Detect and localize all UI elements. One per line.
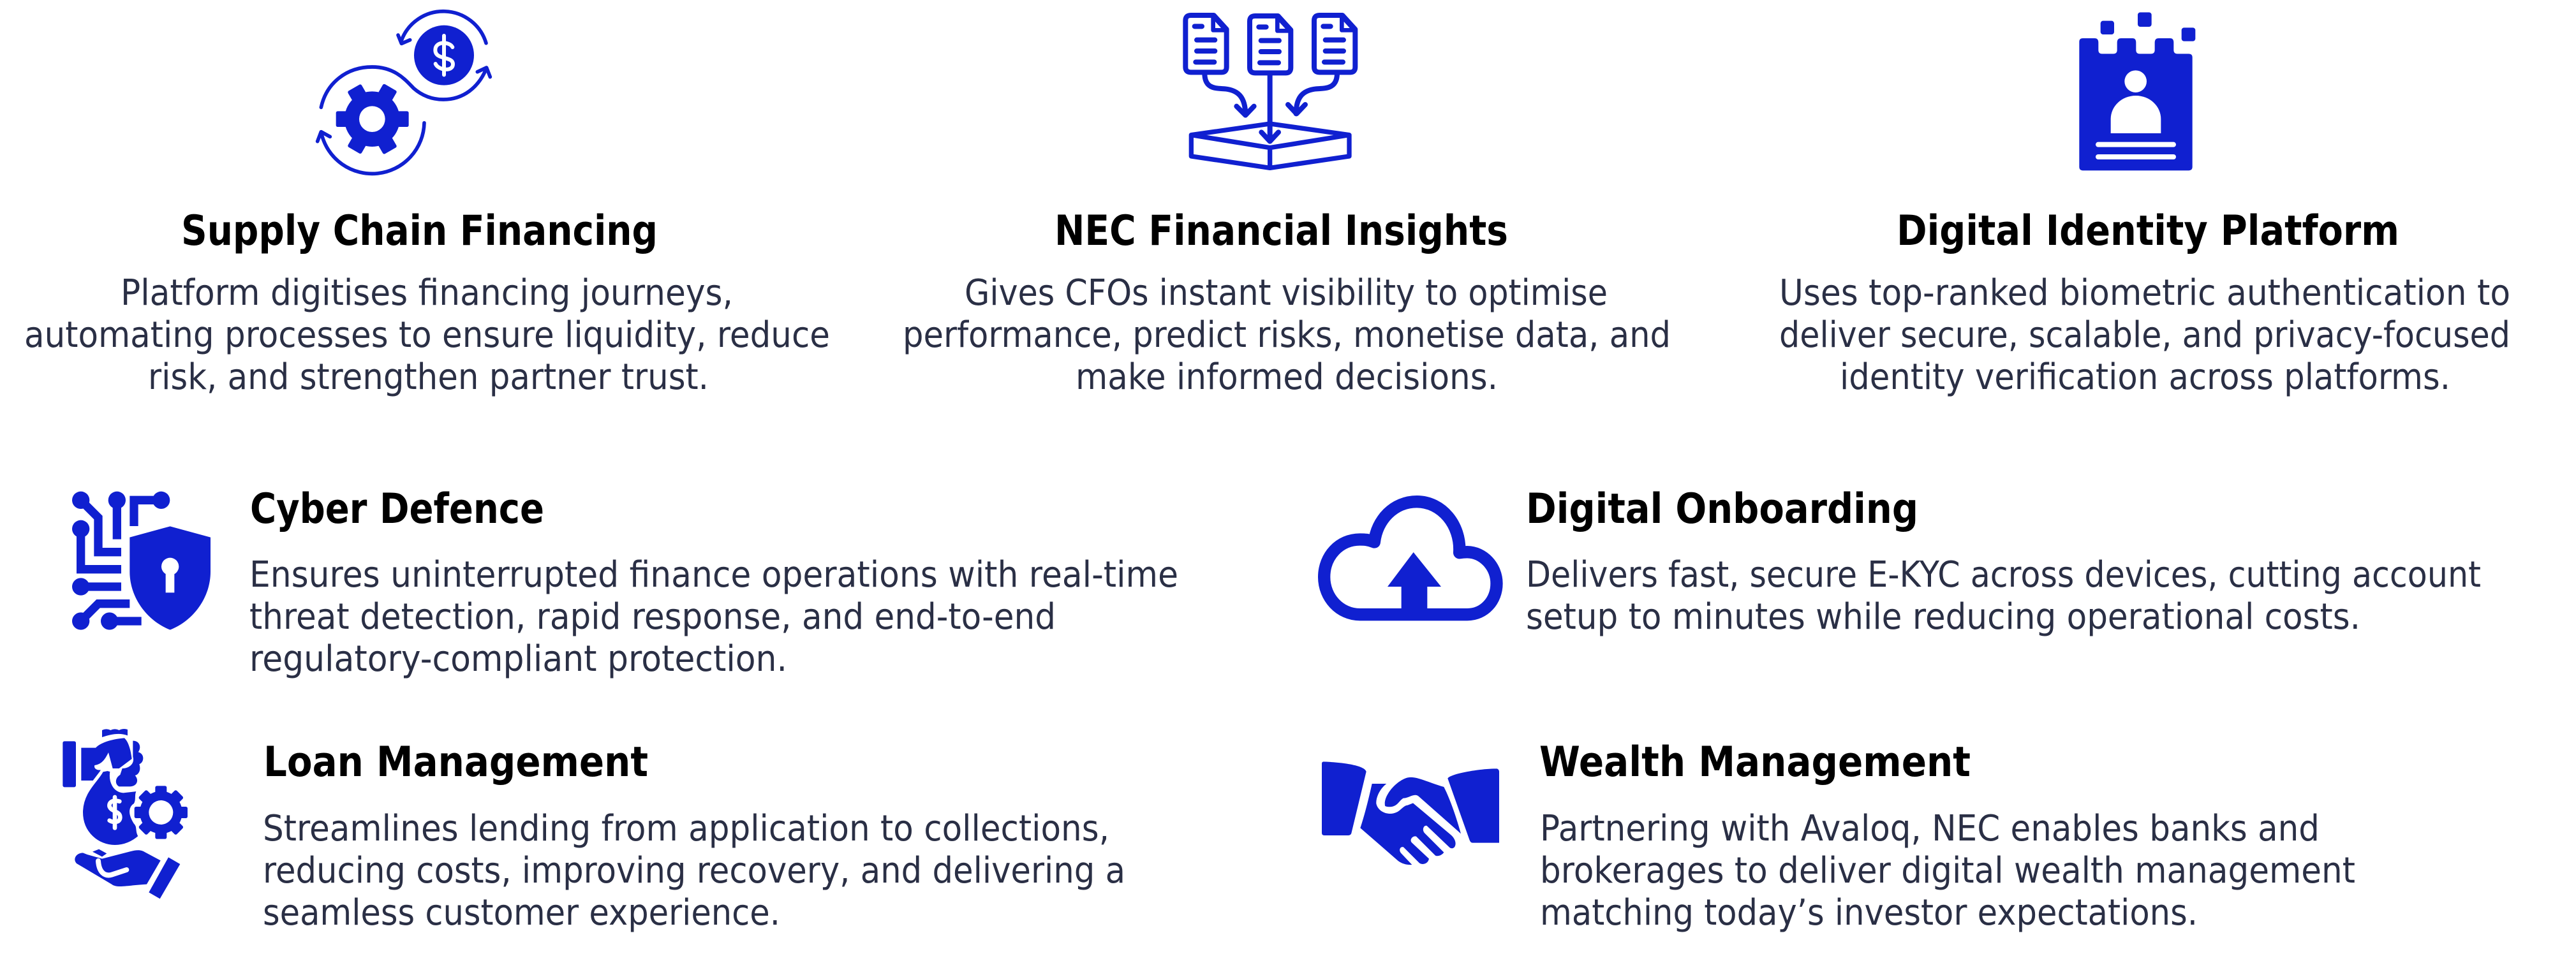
icon: digital ID card (2079, 12, 2195, 170)
heading: NEC Financial Insights (1055, 207, 1508, 255)
icon: circuit shield with keyhole (72, 492, 211, 630)
panel: Digital Identity Platform (1779, 12, 2510, 398)
description: Partnering with Avaloq, NEC enables banks and (1540, 808, 2320, 849)
icon: cloud upload (1324, 502, 1497, 615)
description: risk, and strengthen partner trust. (148, 356, 709, 398)
description: seamless customer experience. (263, 892, 780, 934)
icon: money bag, hands and gear (63, 729, 188, 899)
heading: Wealth Management (1539, 738, 1971, 786)
icon: documents into box (1185, 15, 1355, 168)
icon: gear and dollar cycle (318, 11, 490, 173)
description: setup to minutes while reducing operational costs. (1526, 596, 2360, 638)
description: Ensures uninterrupted finance operations with real-time (249, 554, 1178, 596)
panel: NEC Financial Insights (903, 15, 1671, 398)
description (24, 272, 830, 398)
description: Streamlines lending from application to collections, (263, 808, 1109, 849)
panel: Cyber Defence (72, 485, 1178, 680)
heading: Loan Management (263, 738, 648, 786)
description (1526, 554, 2481, 638)
description (903, 272, 1671, 398)
description: Uses top-ranked biometric authentication to (1779, 272, 2510, 314)
panel: Supply Chain Financing (24, 11, 830, 398)
description (249, 554, 1178, 680)
panel: Wealth Management (1322, 738, 2355, 934)
heading: Cyber Defence (250, 485, 544, 533)
description: matching today’s investor expectations. (1540, 892, 2198, 934)
heading: Digital Identity Platform (1897, 207, 2399, 255)
description: regulatory-compliant protection. (249, 638, 787, 680)
description: identity verification across platforms. (1840, 356, 2450, 398)
panel: Loan Management (63, 729, 1125, 934)
description: Delivers fast, secure E-KYC across devices, cutting account (1526, 554, 2481, 596)
description: Gives CFOs instant visibility to optimise (965, 272, 1608, 314)
icon: handshake (1322, 761, 1499, 865)
description: make informed decisions. (1076, 356, 1498, 398)
description: Platform digitises financing journeys, (121, 272, 733, 314)
description: threat detection, rapid response, and end-to-end (249, 596, 1056, 638)
description: performance, predict risks, monetise data, and (903, 314, 1671, 356)
description (1779, 272, 2510, 398)
heading: Supply Chain Financing (181, 207, 658, 255)
description (1540, 808, 2355, 934)
description (263, 808, 1125, 934)
description: brokerages to deliver digital wealth management (1540, 850, 2355, 892)
description: reducing costs, improving recovery, and delivering a (263, 850, 1125, 892)
description: automating processes to ensure liquidity, reduce (24, 314, 830, 356)
heading: Digital Onboarding (1526, 485, 1918, 533)
panel: Digital Onboarding (1324, 485, 2481, 638)
description: deliver secure, scalable, and privacy-focused (1779, 314, 2510, 356)
